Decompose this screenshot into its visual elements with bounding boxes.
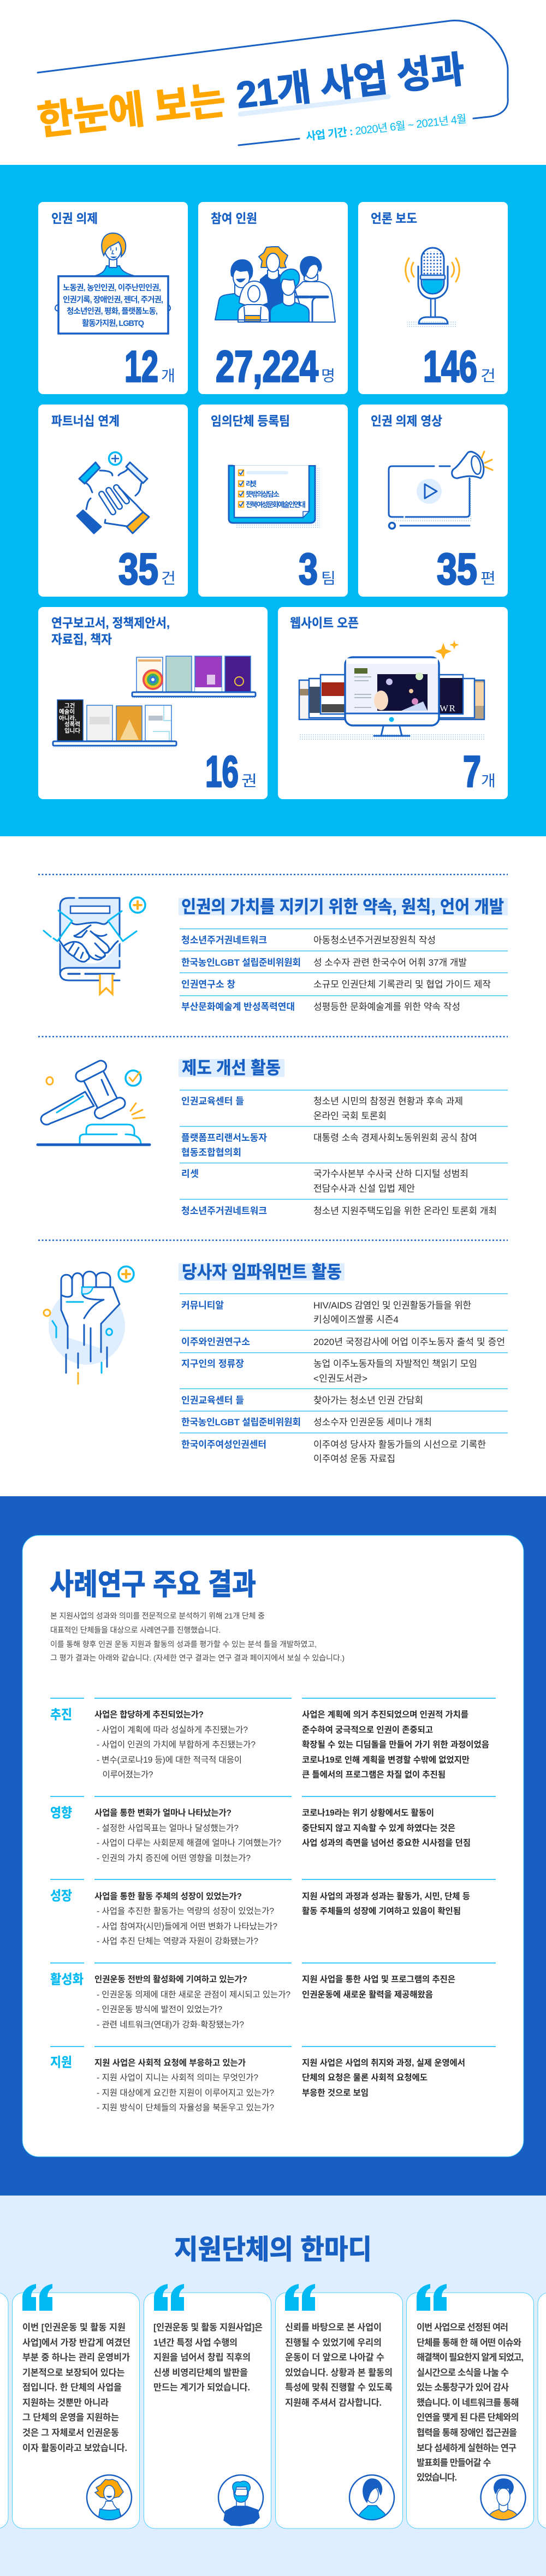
row: 성장: - 사업 추진 단체는 역량과 자원이 강화됐는가? <box>97 1936 258 1946</box>
book cover text: 성폭력 <box>64 721 80 728</box>
heading: 당사자 임파워먼트 활동 <box>182 1262 342 1282</box>
table: HIV/AIDS 감염인 및 인권활동가들을 위한 <box>313 1300 471 1311</box>
quote text: 지원하는 것뿐만 아니라 <box>22 2398 109 2408</box>
figure: 35건: 건 <box>161 570 176 587</box>
sign text: 인권기록, 장애인권, 젠더, 주거권, <box>63 295 163 305</box>
section background: results in numbers <box>0 165 546 836</box>
row: 지원: - 지원 방식이 단체들의 자율성을 북돋우고 있는가? <box>97 2103 274 2113</box>
panel: testimonial 4 <box>406 2284 534 2529</box>
table: 이주와인권연구소 <box>181 1337 250 1347</box>
quote text: 것은 그 자체로서 인권운동 <box>22 2428 119 2438</box>
figure: 146건: 146 <box>423 342 477 391</box>
icon: quotation mark <box>285 2284 315 2311</box>
quote text <box>417 2322 524 2483</box>
panel: 인권 의제 <box>38 202 188 394</box>
checklist text: 리셋 <box>246 480 257 488</box>
checkboxes <box>239 470 244 507</box>
quote text: 만드는 계기가 되었습니다. <box>153 2383 250 2393</box>
row: 지원: 지원 사업은 사회적 요청에 부응하고 있는가 <box>94 2058 246 2068</box>
panel heading: 참여 인원 <box>211 211 257 225</box>
row: 영향: 코로나19라는 위기 상황에서도 활동이 <box>302 1808 434 1818</box>
sign text: 청소년인권, 평화, 플랫폼노동, <box>67 307 158 316</box>
row: 성장: 지원 사업의 과정과 성과는 활동가, 시민, 단체 등 <box>302 1891 470 1901</box>
quote text: 지원해 주셔서 감사합니다. <box>285 2398 382 2408</box>
row: 성장: - 사업을 추진한 활동가는 역량의 성장이 있었는가? <box>97 1906 274 1916</box>
panel: testimonial 2 <box>144 2284 271 2529</box>
table: <인권도서관> <box>313 1373 367 1384</box>
panel: 웹사이트 오픈 <box>278 607 508 799</box>
quote text: 부분 중 하나는 관리 운영비가 <box>22 2353 130 2363</box>
figure: 16권: 16 <box>205 747 239 796</box>
figure: 7개: 7 <box>463 747 481 796</box>
figure: 146건: 건 <box>480 367 496 384</box>
figure: 3팀: 3 <box>299 545 318 594</box>
panel heading: 인권 의제 영상 <box>371 414 442 428</box>
icon: group of people <box>215 247 335 322</box>
row: 활성화: 인권운동 전반의 활성화에 기여하고 있는가? <box>94 1974 247 1984</box>
avatar: orange curly hair <box>87 2475 132 2520</box>
quote text: 협력을 통해 장애인 접근권을 <box>417 2428 517 2438</box>
row: 추진: 확장될 수 있는 디딤돌을 만들어 가기 위한 과정이었음 <box>302 1740 489 1750</box>
icon: checklist <box>229 461 320 528</box>
figure: 27,224명: 27,224 <box>216 342 318 391</box>
quote text <box>153 2322 263 2393</box>
sparkles <box>435 643 452 659</box>
intro paragraph: 이를 통해 향후 인권 운동 지원과 활동의 성과를 평가할 수 있는 분석 틀을 개발하였고, <box>50 1640 317 1649</box>
figure: 12개: 12 <box>124 342 158 391</box>
icon: raised fist <box>44 1266 134 1384</box>
row: 추진: 추진 <box>50 1708 72 1722</box>
row: 영향: 중단되지 않고 지속할 수 있게 하였다는 것은 <box>302 1823 455 1833</box>
table: 2020년 국정감사에 어업 이주노동자 출석 및 증언 <box>313 1337 505 1347</box>
table: 키싱에이즈쌀롱 시즌4 <box>313 1314 399 1325</box>
table: 성소수자 인권운동 세미나 개최 <box>313 1417 432 1427</box>
icon: book with handshake <box>44 897 145 994</box>
person: blue hair <box>270 302 309 322</box>
icon: stacked hands <box>77 452 149 533</box>
table: 한국농인LGBT 설립준비위원회 <box>181 957 301 968</box>
table: 부산문화예술계 반성폭력연대 <box>181 1002 295 1012</box>
sign text: 노동권, 농인인권, 이주난민인권, <box>63 283 161 293</box>
avatar: short dark hair <box>349 2475 394 2520</box>
icon: microphone <box>406 248 459 328</box>
row: 지원: - 지원 대상에게 요긴한 지원이 이루어지고 있는가? <box>97 2088 274 2098</box>
monitor <box>381 727 402 736</box>
row: 지원: 지원 사업은 사업의 취지와 과정, 실제 운영에서 <box>302 2058 465 2068</box>
row: 추진: - 변수(코로나19 등)에 대한 적극적 대응이 <box>97 1755 242 1765</box>
panel heading: 언론 보도 <box>371 211 417 225</box>
row: 추진: 사업은 계획에 의거 추진되었으며 인권적 가치를 <box>302 1710 468 1720</box>
table: 국가수사본부 수사국 산하 디지털 성범죄 <box>313 1169 468 1179</box>
icon: website monitor: WR <box>440 703 456 713</box>
sign text <box>63 283 163 328</box>
intro paragraph: 그 평가 결과는 아래와 같습니다. (자세한 연구 결과는 연구 결과 페이지에서 보실 수 있습니다.) <box>50 1653 345 1662</box>
table: 리셋 <box>181 1169 199 1179</box>
table <box>180 929 508 1012</box>
person: child <box>239 281 268 306</box>
quote text: 신뢰를 바탕으로 본 사업이 <box>285 2322 382 2333</box>
quote text: 특성에 맞춰 진행할 수 있도록 <box>285 2382 393 2393</box>
figure: 27,224명: 명 <box>321 367 335 384</box>
figure: 16권: 권 <box>241 772 257 789</box>
row: 성장 <box>50 1879 496 1946</box>
quote text: 그 단체의 운영을 지원하는 <box>22 2413 119 2423</box>
bottom bookshelf <box>52 700 176 748</box>
panel: 사례연구 주요 결과 <box>22 1535 524 2157</box>
person: orange hair <box>257 275 292 322</box>
project period: 사업 기간 : 2020년 6월 ~ 2021년 4월 <box>305 112 467 143</box>
table: 한국이주여성인권센터 <box>181 1439 266 1450</box>
panel heading: 자료집, 책자 <box>51 632 112 646</box>
table: 지구인의 정류장 <box>181 1359 244 1369</box>
row: 활성화: - 인권운동 의제에 대한 새로운 관점이 제시되고 있는가? <box>97 1990 290 2000</box>
icon: person holding sign <box>55 233 170 334</box>
icon: gavel <box>38 1059 150 1145</box>
row: 활성화: - 인권운동 방식에 발전이 있었는가? <box>97 2004 222 2014</box>
section background: testimonials <box>0 2196 546 2576</box>
icon: website monitor <box>299 640 484 740</box>
panel: testimonial 1 <box>12 2284 140 2529</box>
row: 활성화: 지원 사업을 통한 사업 및 프로그램의 추진은 <box>302 1974 455 1984</box>
row: 추진: - 사업이 인권의 가치에 부합하게 추진됐는가? <box>97 1740 256 1750</box>
table: 아동청소년주거권보장원칙 작성 <box>313 935 436 945</box>
row: 지원: 단체의 요청은 물론 사회적 요청에도 <box>302 2073 428 2083</box>
row: 추진 <box>50 1698 496 1780</box>
intro paragraph <box>50 1611 345 1662</box>
figure: 3팀: 팀 <box>321 570 336 587</box>
megaphone <box>452 452 484 478</box>
table: 청소년주거권네트워크 <box>181 1206 267 1216</box>
quote text: 발표회를 만들어갈 수 <box>417 2458 491 2468</box>
row: 지원: - 지원 사업이 지니는 사회적 의미는 무엇인가? <box>97 2073 258 2083</box>
row: 성장: 성장 <box>50 1889 72 1903</box>
figure: 12개: 개 <box>161 367 175 384</box>
quote text: 점입니다. 한 단체의 사업을 <box>22 2382 122 2393</box>
title: 한눈에 보는: 한눈에 보는 <box>35 79 228 144</box>
table: 이주여성 당사자 활동가들의 시선으로 기록한 <box>313 1439 486 1450</box>
table: 성 소수자 관련 한국수어 어휘 37개 개발 <box>313 957 467 968</box>
table <box>180 1294 508 1464</box>
panel: 참여 인원 <box>198 202 348 394</box>
quote text <box>285 2322 393 2408</box>
quote text: 신생 비영리단체의 발판을 <box>153 2368 248 2378</box>
heading: 사례연구 주요 결과 <box>50 1568 256 1601</box>
sign text: 활동가지원, LGBTQ <box>82 319 144 328</box>
title frame line <box>38 21 508 145</box>
person: right with wheelchair <box>295 282 335 322</box>
row: 성장: 사업을 통한 활동 주체의 성장이 있었는가? <box>94 1891 242 1901</box>
quote text: 있었습니다. 상황과 본 활동의 <box>285 2368 393 2378</box>
panel: testimonial 3 <box>275 2284 403 2529</box>
row: 지원: 부응한 것으로 보임 <box>302 2088 369 2098</box>
heading: 제도 개선 활동 <box>182 1058 281 1078</box>
row: 추진: 준수하여 궁극적으로 인권이 존중되고 <box>302 1725 433 1735</box>
quote text: 했습니다. 이 네트워크를 통해 <box>417 2397 519 2408</box>
book cover text: 그건 <box>64 703 75 709</box>
table: 전담수사과 신설 입법 제안 <box>313 1183 415 1194</box>
book cover text: 예술이 <box>59 708 75 715</box>
row: 영향: 사업 성과의 측면을 넘어선 중요한 시사점을 던짐 <box>302 1838 471 1848</box>
table: 소규모 인권단체 기록관리 및 협업 가이드 제작 <box>313 979 491 990</box>
panel heading: 연구보고서, 정책제안서, <box>51 616 170 630</box>
row: 영향 <box>50 1796 496 1863</box>
header: title area <box>35 21 508 145</box>
row: 영향: 영향 <box>50 1806 72 1821</box>
table: 협동조합협의회 <box>181 1147 241 1158</box>
person: left <box>215 294 254 320</box>
quote text: 있는 소통창구가 있어 감사 <box>417 2383 509 2393</box>
avatar: bearded man <box>218 2475 263 2526</box>
table: 농업 이주노동자들의 자발적인 책읽기 모임 <box>313 1359 477 1369</box>
quote text <box>22 2323 130 2453</box>
row: 활성화: 인권운동에 새로운 활력을 제공해왔음 <box>302 1990 433 2000</box>
panel heading: 임의단체 등록팀 <box>211 414 290 428</box>
row: 지원: 지원 <box>50 2055 72 2070</box>
table: 온라인 국회 토론회 <box>313 1111 387 1121</box>
divider dots <box>38 874 508 1240</box>
icon: video with megaphone <box>389 451 492 528</box>
avatar: curly dark hair <box>480 2475 525 2520</box>
intro paragraph: 대표적인 단체들을 대상으로 사례연구를 진행했습니다. <box>50 1626 221 1634</box>
quote text: 해결책이 필요한지 알게 되었고, <box>417 2352 524 2363</box>
table: 인권교육센터 들 <box>181 1395 244 1406</box>
table <box>180 1090 508 1216</box>
table: 이주여성 운동 자료집 <box>313 1454 395 1464</box>
row: 활성화: 활성화 <box>50 1972 84 1987</box>
section: 당사자 임파워먼트 활동 <box>44 1262 508 1464</box>
heading: 지원단체의 한마디: 지원단체의 한마디 <box>174 2234 372 2265</box>
quote text: 보다 섬세하게 실현하는 연구 <box>417 2443 517 2453</box>
panel heading: 파트너십 연계 <box>51 414 120 428</box>
left windows <box>299 680 345 719</box>
row: 활성화: - 관련 네트워크(연대)가 강화·확장됐는가? <box>97 2020 244 2030</box>
figure: 35편: 35 <box>437 545 477 594</box>
icon: quotation mark <box>22 2284 52 2311</box>
quote text: 기본적으로 보장되어 있다는 <box>22 2368 125 2378</box>
book cover text: 아니라, <box>59 715 76 722</box>
figure: 35건: 35 <box>118 545 158 594</box>
right windows <box>438 680 484 719</box>
quote text: 1년간 특정 사업 수행의 <box>153 2337 238 2348</box>
quote text: 진행될 수 있었기에 우리의 <box>285 2337 382 2348</box>
row: 추진: 큰 틀에서의 프로그램은 차질 없이 추진됨 <box>302 1770 446 1780</box>
row: 성장: - 사업 참여자(시민)들에게 어떤 변화가 나타났는가? <box>97 1921 277 1931</box>
row: 영향: - 인권의 가치 증진에 어떤 영향을 미쳤는가? <box>97 1853 251 1863</box>
row: 성장: 활동 주체들의 성장에 기여하고 있음이 확인됨 <box>302 1906 461 1916</box>
row: 추진: 코로나19로 인해 계획을 변경할 수밖에 없었지만 <box>302 1755 470 1765</box>
title highlight <box>240 97 388 114</box>
panel: edge card right <box>538 2293 546 2529</box>
table: 플랫폼프리랜서노동자 <box>181 1133 267 1143</box>
title: 21개 사업 성과: 21개 사업 성과 <box>234 49 467 116</box>
quote text: [인권운동 및 활동 지원사업]은 <box>153 2322 263 2333</box>
book cover text: 입니다 <box>64 727 80 734</box>
icon: quotation mark <box>154 2284 184 2311</box>
icon: quotation mark <box>417 2284 447 2311</box>
section: 제도 개선 활동 <box>38 1058 508 1216</box>
quote text: 지원을 넘어서 창립 직후의 <box>153 2353 251 2363</box>
table: 인권교육센터 들 <box>181 1096 244 1106</box>
table: 인권연구소 창 <box>181 979 235 990</box>
intro paragraph: 본 지원사업의 성과와 의미를 전문적으로 분석하기 위해 21개 단체 중 <box>50 1611 265 1620</box>
quote text: 운동이 더 앞으로 나아갈 수 <box>285 2353 384 2363</box>
panel: 인권 의제 영상 <box>358 404 508 597</box>
table: 찾아가는 청소년 인권 간담회 <box>313 1395 423 1406</box>
table: 청소년 시민의 참정권 현황과 후속 과제 <box>313 1096 463 1106</box>
row: 추진: 사업은 합당하게 추진되었는가? <box>94 1710 204 1720</box>
panel: 언론 보도 <box>358 202 508 394</box>
table: 청소년주거권네트워크 <box>181 935 267 945</box>
panel: 연구보고서 <box>38 607 268 799</box>
checklist text: 뜻밖의상담소 <box>246 490 280 498</box>
figure: 3팀 <box>299 545 336 594</box>
checklist text <box>246 480 306 509</box>
checklist text: 전북여성문화예술인연대 <box>246 501 306 509</box>
panel: 파트너십 연계 <box>38 404 188 597</box>
row: 추진: - 사업이 계획에 따라 성실하게 추진됐는가? <box>97 1725 248 1735</box>
quote text: 인연을 맺게 된 다른 단체와의 <box>417 2413 519 2423</box>
quote text: 이번 [인권운동 및 활동 지원 <box>22 2323 126 2333</box>
row: 영향: - 사업이 다루는 사회문제 해결에 얼마나 기여했는가? <box>97 1838 281 1848</box>
figure: 7개: 개 <box>481 772 496 789</box>
row: 추진: 이루어졌는가? <box>103 1770 153 1780</box>
quote text: 단체를 통해 한 해 어떤 이슈와 <box>417 2338 521 2348</box>
quote text: 이자 활동이라고 보았습니다. <box>22 2443 127 2453</box>
panel: 임의단체 등록팀 <box>198 404 348 597</box>
panel heading: 인권 의제 <box>51 211 98 225</box>
panel: edge card left <box>0 2293 8 2529</box>
book cover text <box>59 703 80 734</box>
table: 대통령 소속 경제사회노동위원회 공식 참여 <box>313 1133 477 1143</box>
quote text: 실시간으로 소식을 나눌 수 <box>417 2368 509 2378</box>
heading: 인권의 가치를 지키기 위한 약속, 원칙, 언어 개발 <box>181 897 504 917</box>
quote text: 이번 사업으로 선정된 여러 <box>417 2322 508 2333</box>
row: 활성화 <box>50 1963 496 2030</box>
row: 지원 <box>50 2046 496 2113</box>
top bookshelf <box>132 656 256 699</box>
row: 영향: 사업을 통한 변화가 얼마나 나타났는가? <box>94 1808 232 1818</box>
table: 청소년 지원주택도입을 위한 온라인 토론회 개최 <box>313 1206 497 1216</box>
figure: 35편: 편 <box>480 570 496 587</box>
table: 커뮤니티알 <box>181 1300 224 1311</box>
row: 영향: - 설정한 사업목표는 얼마나 달성했는가? <box>97 1823 239 1833</box>
quote text: 사업]에서 가장 반갑게 여겼던 <box>22 2337 130 2348</box>
quote text: 있었습니다. <box>417 2473 457 2483</box>
table: 성평등한 문화예술계를 위한 약속 작성 <box>313 1002 460 1012</box>
panel heading: 웹사이트 오픈 <box>290 616 359 630</box>
table: 한국농인LGBT 설립준비위원회 <box>181 1417 301 1427</box>
section background: case study <box>0 1496 546 2196</box>
section: 인권의 가치 <box>44 897 508 1012</box>
panel heading <box>51 616 170 646</box>
